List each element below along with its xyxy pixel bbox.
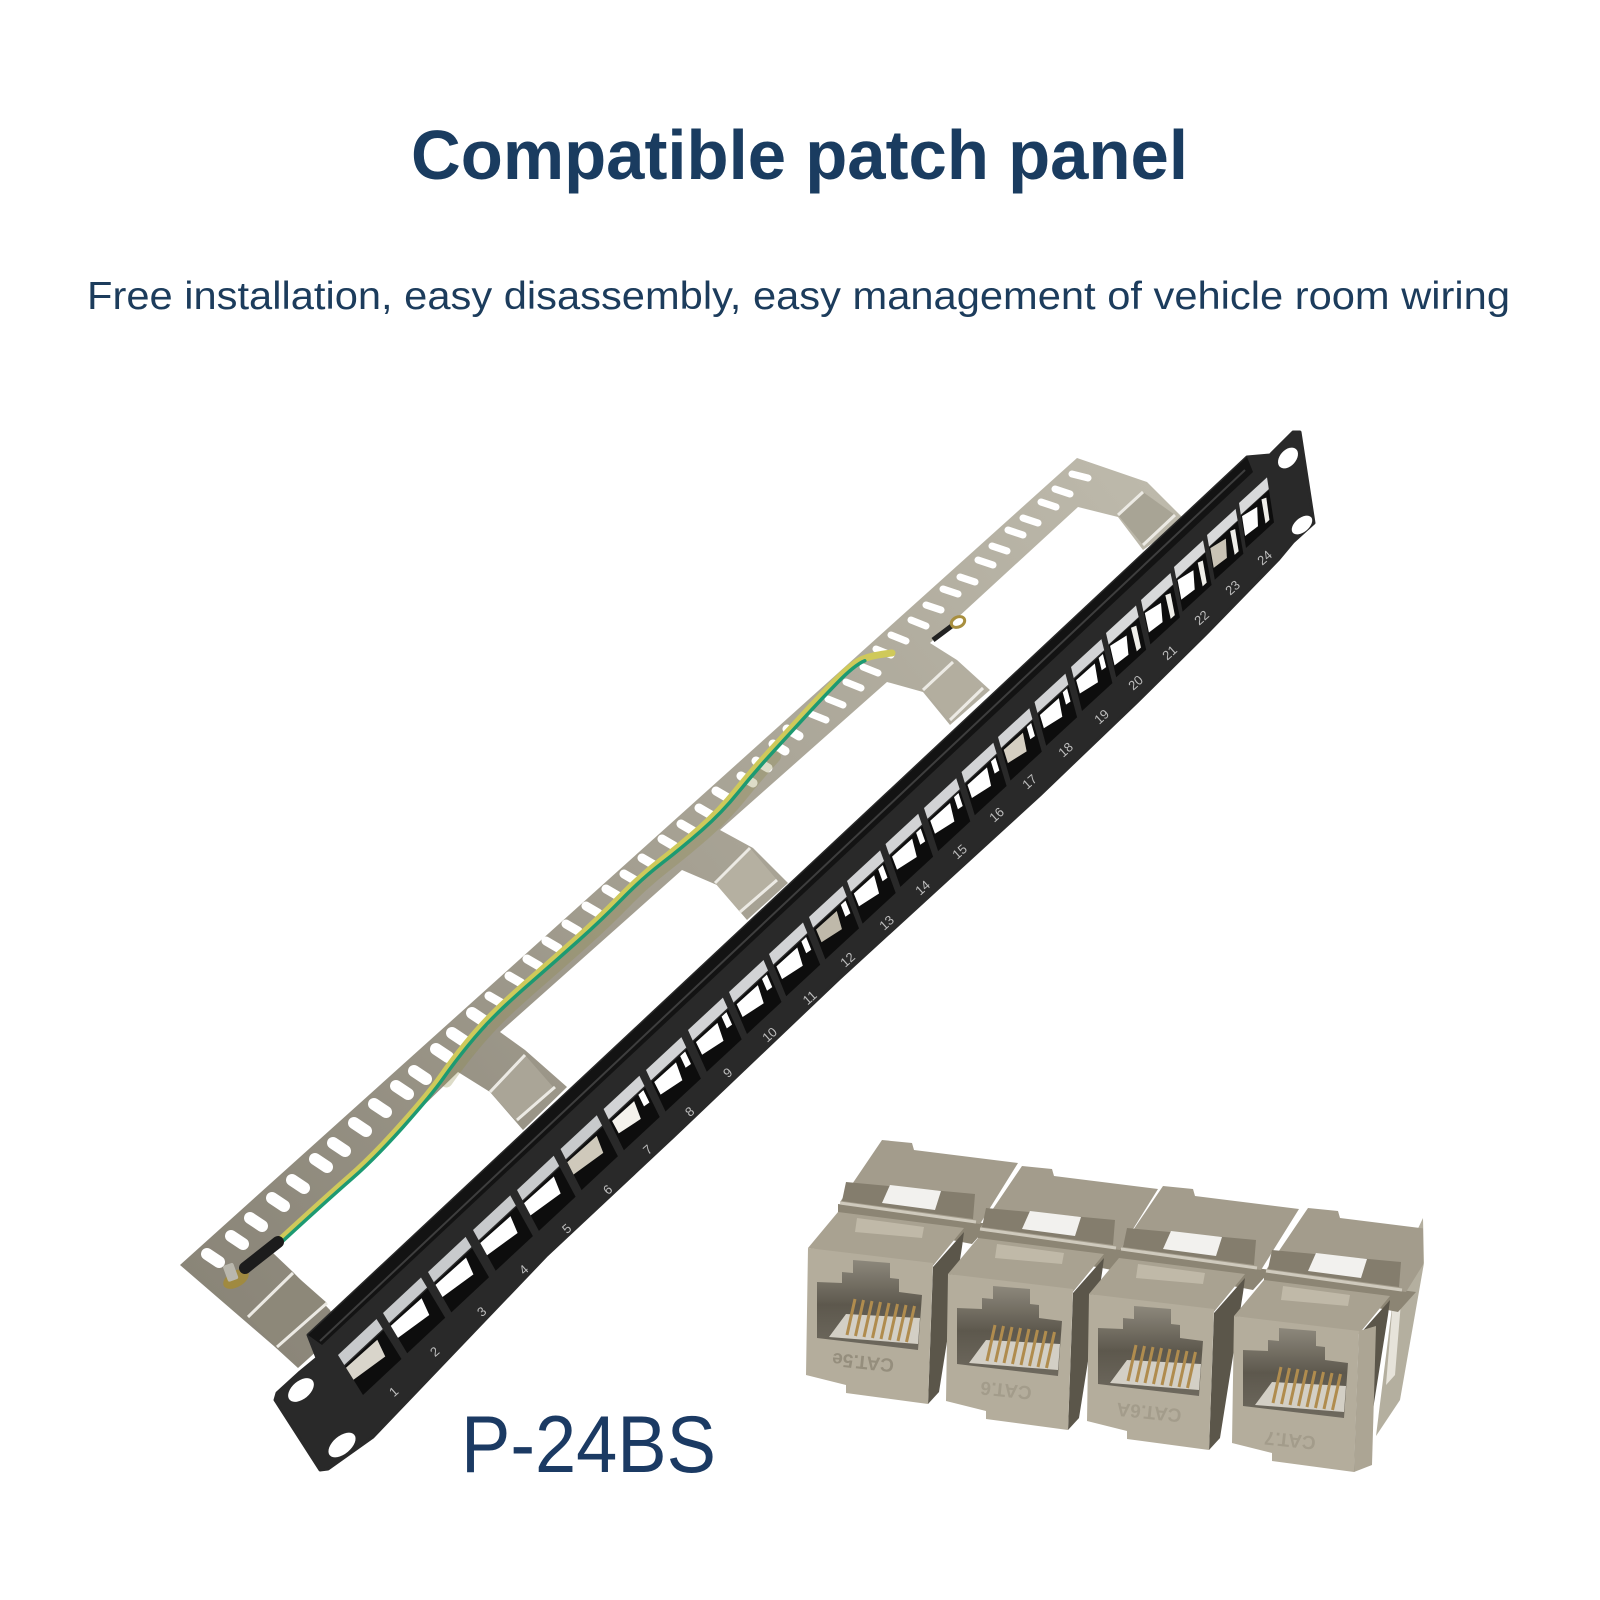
port numbers: 15 xyxy=(949,841,970,862)
rear steel cable bracket xyxy=(180,458,1185,1368)
module: CAT.6: CAT.6 xyxy=(979,1376,1033,1403)
subtitle: Free installation, easy disassembly, easy management of vehicle room wiring xyxy=(87,275,1510,318)
port numbers: 20 xyxy=(1125,672,1146,693)
port numbers: 2 xyxy=(427,1344,442,1360)
title: Compatible patch panel xyxy=(411,116,1188,194)
port numbers: 1 xyxy=(386,1384,401,1400)
port numbers: 8 xyxy=(682,1104,697,1120)
bracket slots xyxy=(207,474,1088,1262)
port numbers: 7 xyxy=(640,1142,655,1158)
mounting holes xyxy=(284,444,1316,1462)
module: CAT.6 xyxy=(946,1166,1158,1430)
port numbers: 10 xyxy=(759,1024,780,1045)
module: CAT.5e xyxy=(806,1140,1018,1404)
model number: P-24BS xyxy=(461,1400,716,1490)
port numbers: 19 xyxy=(1091,706,1112,727)
wire sleeve and ground screw xyxy=(220,1242,278,1293)
port numbers: 6 xyxy=(600,1182,615,1198)
module: CAT.6A xyxy=(1087,1186,1299,1450)
port numbers: 22 xyxy=(1191,607,1212,628)
module: CAT.6A: CAT.6A xyxy=(1115,1398,1183,1425)
24 keystone ports xyxy=(338,477,1274,1395)
port numbers: 18 xyxy=(1055,739,1076,760)
port numbers: 24 xyxy=(1254,547,1275,568)
port numbers: 13 xyxy=(876,912,897,933)
green and yellow ground wire xyxy=(278,653,892,1244)
port numbers: 4 xyxy=(516,1262,531,1278)
module: CAT.5e: CAT.5e xyxy=(831,1348,895,1375)
port numbers: 17 xyxy=(1019,771,1040,792)
port numbers: 9 xyxy=(720,1065,735,1081)
port numbers: 21 xyxy=(1159,642,1180,663)
port numbers xyxy=(386,547,1275,1400)
port numbers: 11 xyxy=(800,988,820,1008)
port numbers: 3 xyxy=(474,1304,489,1320)
keystone jack modules xyxy=(806,1140,1444,1472)
port numbers: 16 xyxy=(986,804,1007,825)
black front faceplate xyxy=(275,432,1314,1470)
module: CAT.7: CAT.7 xyxy=(1263,1426,1317,1453)
infographic canvas xyxy=(90,128,1508,1473)
patch panel product illustration xyxy=(180,432,1316,1470)
top rail of the faceplate xyxy=(308,457,1253,1345)
module: CAT.7 rear side body xyxy=(1376,1218,1424,1436)
port numbers: 12 xyxy=(837,949,858,970)
rear lug xyxy=(933,615,966,640)
port numbers: 23 xyxy=(1222,577,1243,598)
port numbers: 14 xyxy=(912,877,933,898)
module: CAT.7 xyxy=(1232,1208,1444,1472)
port numbers: 5 xyxy=(559,1221,574,1237)
